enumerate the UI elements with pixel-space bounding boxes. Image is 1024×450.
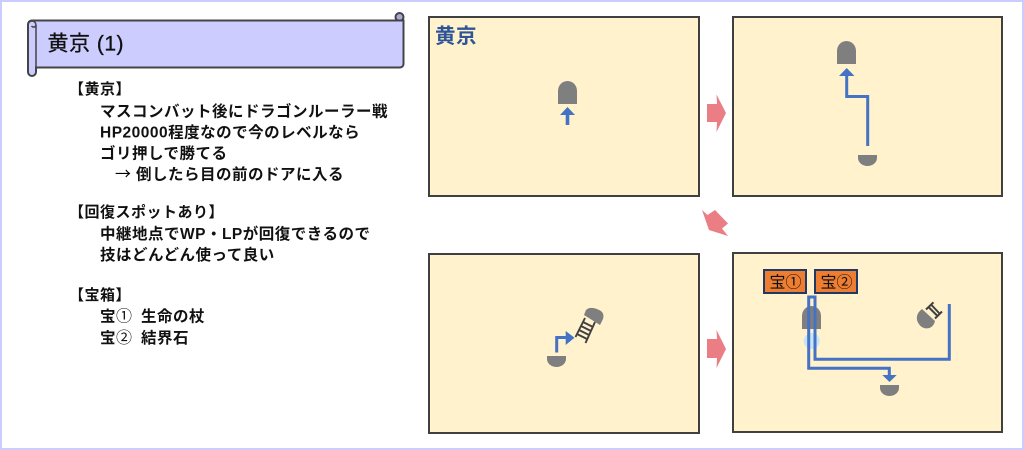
arrow head [882, 375, 897, 382]
icon: entrance [858, 155, 877, 166]
panel: map 4 [733, 253, 1002, 432]
arrow: map 1 to map 2 [707, 94, 726, 132]
text block: 黄京: HP20000程度なので今のレベルなら [100, 122, 360, 142]
text block: 黄京: → [115, 160, 131, 184]
text block: 宝箱 [69, 286, 205, 348]
text block: 黄京: マスコンバット後にドラゴンルーラー戦 [100, 102, 388, 120]
treasure label 2: 宝② [820, 268, 853, 292]
text block: 宝箱: 生命の杖 [141, 308, 205, 326]
text block: 回復スポットあり: 中継地点でWP・LPが回復できるので [100, 224, 370, 243]
arrow: route up [839, 68, 868, 146]
map label: 黄京 [435, 25, 477, 48]
panel: map 2 [733, 17, 1002, 196]
icon: door [837, 41, 856, 64]
panel: map 3 [429, 254, 699, 433]
text block: 宝箱: 【宝箱】 [69, 286, 131, 304]
highlight: glow [804, 333, 820, 349]
title: 黄京 (1) [48, 32, 124, 56]
icon: door [558, 81, 577, 104]
text block: 黄京: 倒したら目の前のドアに入る [136, 164, 344, 184]
arrow: map 2 to map 4 [702, 210, 728, 236]
panel: map 1 [429, 17, 699, 196]
icon: entrance [547, 356, 566, 367]
text block: 黄京: 【黄京】 [69, 80, 131, 98]
icon: ladder object [917, 302, 942, 328]
text block: 宝箱: 宝② [100, 324, 132, 348]
route line [809, 297, 949, 375]
title scroll banner [28, 13, 403, 76]
icon: entrance [880, 385, 899, 396]
treasure label 1: 宝① [770, 268, 802, 292]
text block: 黄京: ゴリ押しで勝てる [100, 144, 228, 162]
text block: 回復スポットあり: 【回復スポットあり】 [69, 204, 224, 221]
text block: 回復スポットあり: 技はどんどん使って良い [100, 245, 275, 264]
text block: 宝箱: 宝① [100, 302, 132, 326]
icon: door [802, 306, 821, 329]
text block: 黄京 [69, 80, 388, 184]
text block: 回復スポットあり [69, 204, 370, 264]
arrow: route to ladder [557, 331, 574, 352]
arrow: up [560, 107, 575, 125]
arrow: map 3 to map 4 [707, 330, 726, 368]
text block: 宝箱: 結界石 [141, 328, 189, 347]
icon: ladder [576, 308, 603, 343]
